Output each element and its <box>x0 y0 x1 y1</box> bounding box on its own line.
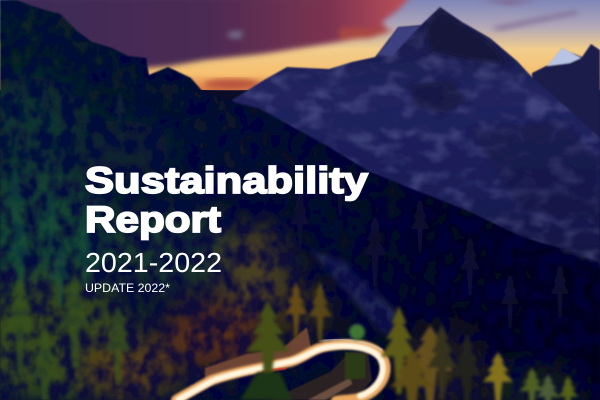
roadside trees and rock wall <box>205 327 372 400</box>
sunset glow <box>204 79 260 89</box>
rock wall <box>205 327 312 382</box>
rocky scree patch <box>310 250 410 345</box>
heading line 2: Report <box>85 199 221 240</box>
date range: 2021-2022 <box>85 247 222 278</box>
conifer rows <box>3 80 570 400</box>
purple cloud <box>0 0 580 70</box>
main mountain <box>232 0 600 270</box>
road underside <box>270 352 372 400</box>
foreground trees <box>240 282 578 400</box>
far mountain right <box>532 44 600 200</box>
light trails on road <box>176 340 386 400</box>
sky <box>0 0 600 90</box>
title <box>85 160 368 295</box>
update note: UPDATE 2022* <box>85 283 171 295</box>
heading line 1: Sustainability <box>85 160 368 201</box>
forest colour patches <box>0 75 580 400</box>
